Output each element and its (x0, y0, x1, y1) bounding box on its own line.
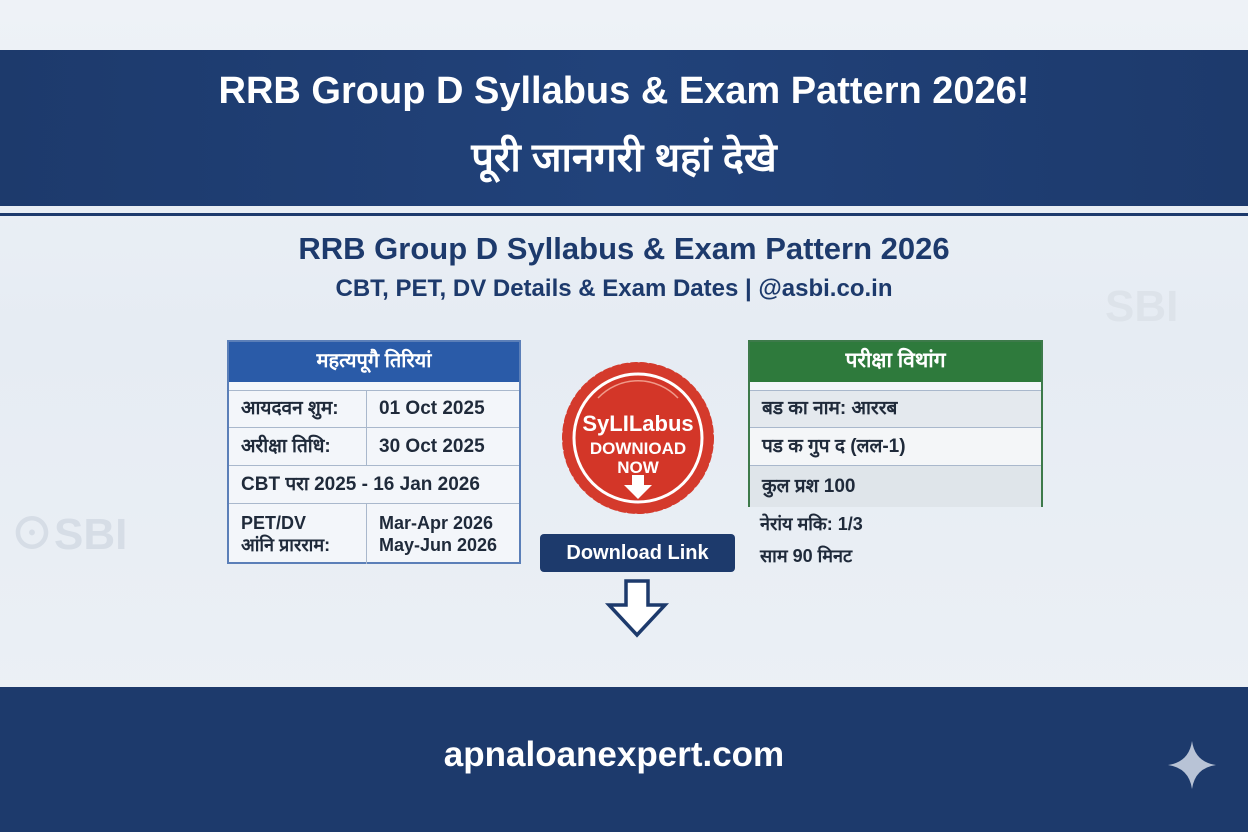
icon: syllabus download badge: NOW (617, 458, 660, 477)
download link button (540, 534, 735, 572)
panel: exam pattern: पड क गुप द (लल-1) (762, 436, 906, 456)
panel: important dates: Mar-Apr 2026 (379, 513, 493, 533)
divider (0, 213, 1248, 216)
header: pattern: परीक्षा विथांग (845, 349, 946, 372)
panel: exam pattern: बड का नाम: आररब (762, 398, 897, 419)
icon: sparkle (1168, 741, 1216, 789)
arrow: down (605, 579, 669, 638)
header: pattern (750, 342, 1041, 382)
title hindi: पूरी जानगरी थहां देखे (471, 136, 777, 180)
panel: important dates: May-Jun 2026 (379, 535, 497, 555)
header: dates: महत्यपूगै तिरियां (317, 350, 431, 372)
subtitle: RRB Group D Syllabus & Exam Pattern 2026 (298, 231, 950, 266)
download link button: Download Link (566, 542, 709, 564)
panel: exam pattern (748, 340, 1043, 507)
subtitle: CBT, PET, DV Details & Exam Dates | @asbi.co.in (336, 275, 892, 302)
title english: RRB Group D Syllabus & Exam Pattern 2026! (219, 70, 1029, 112)
panel: important dates: 30 Oct 2025 (379, 436, 485, 456)
panel: important dates: PET/DV (241, 513, 306, 533)
panel: important dates: 01 Oct 2025 (379, 398, 485, 419)
extra pattern notes: नेरांय मकि: 1/3 (760, 514, 863, 534)
icon: syllabus download badge (562, 362, 714, 514)
watermark SBI: ⊙SBI (10, 510, 127, 559)
header band (0, 50, 1248, 206)
extra pattern notes (760, 514, 863, 566)
panel: important dates (227, 340, 521, 564)
panel: important dates: CBT परा 2025 - 16 Jan 2026 (241, 474, 480, 494)
footer url: apnaloanexpert.com (444, 735, 784, 774)
icon: syllabus download badge: DOWNIOAD (590, 439, 686, 458)
icon: syllabus download badge: SyLILabus (582, 411, 694, 436)
panel: exam pattern: कुल प्रश 100 (762, 476, 855, 496)
panel: important dates: आंनि प्रारराम: (241, 535, 330, 555)
subtitle (298, 231, 950, 302)
panel: important dates: अरीक्षा तिधि: (241, 436, 331, 456)
footer band (0, 687, 1248, 832)
extra pattern notes: साम 90 मिनट (760, 546, 852, 566)
text: SBI (1105, 282, 1178, 331)
header: dates (229, 342, 519, 382)
panel: important dates: आयदवन शुम: (241, 398, 339, 419)
